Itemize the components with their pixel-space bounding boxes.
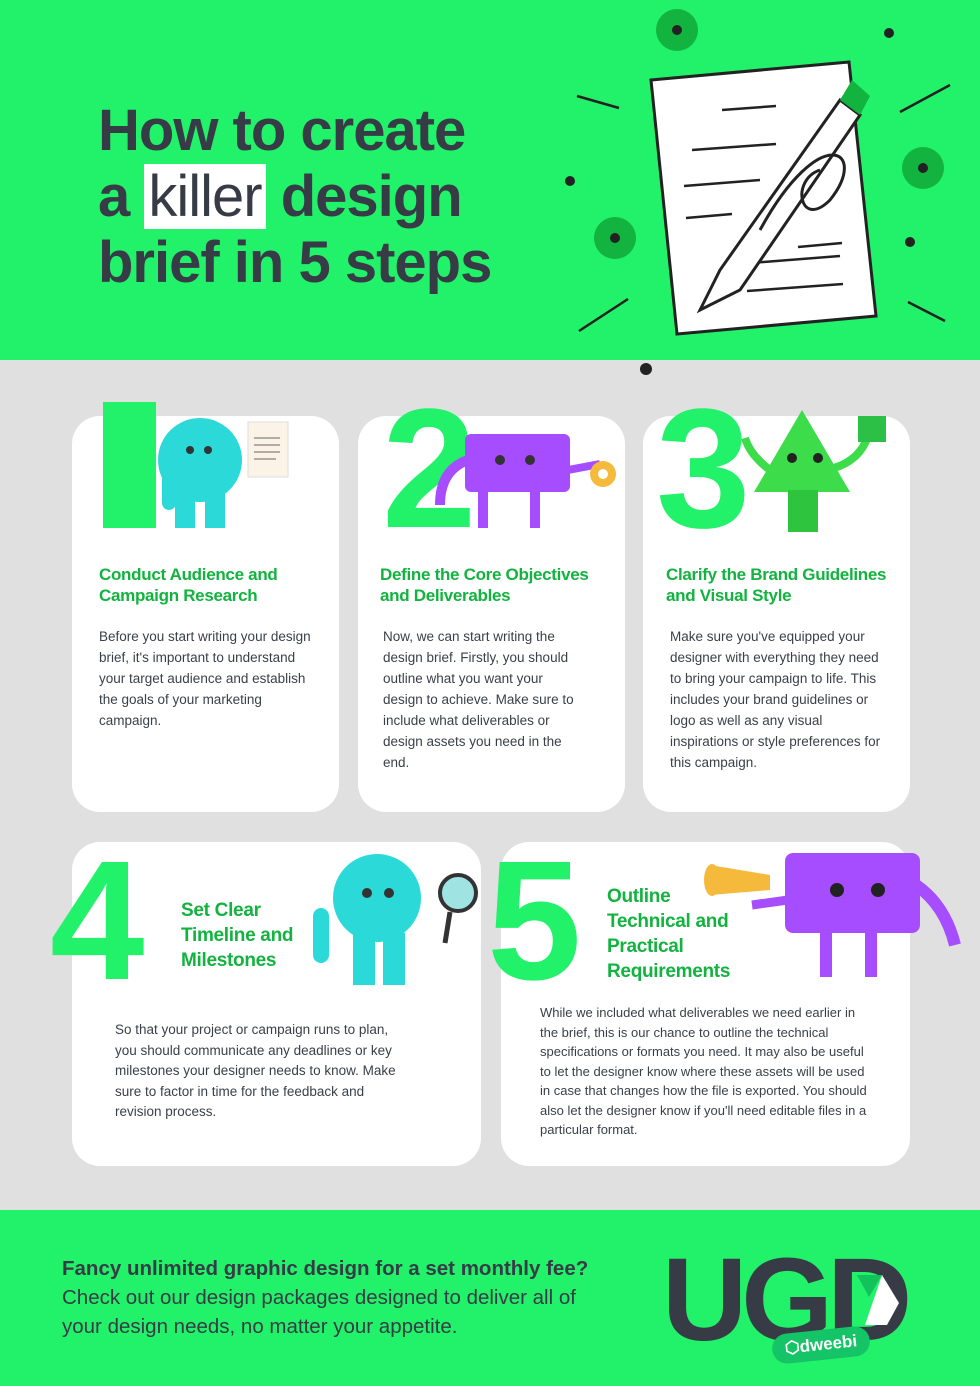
character 5 (704, 853, 961, 977)
heading 2: and Deliverables (380, 586, 510, 605)
text 1: Before you start writing your design brief, it's important to understand your target audience and establish the goals of your marketing campaign. (99, 629, 311, 728)
heading 4: Timeline and (181, 925, 293, 946)
footer band (0, 1210, 980, 1386)
footer text (62, 1257, 588, 1338)
card 5 (501, 842, 910, 1166)
dweebi badge (771, 1325, 871, 1365)
text 4: So that your project or campaign runs to plan, you should communicate any deadlines or key milestones your designer needs to know. Make sure to factor in time for the feedback and revision process. (115, 1022, 396, 1119)
dweebi badge: ⬡dweebi (784, 1331, 858, 1358)
card 3 (643, 416, 910, 812)
title (98, 98, 491, 295)
card 4 (72, 842, 481, 1166)
card 2 (358, 416, 625, 812)
footer text: Check out our design packages designed to deliver all of your design needs, no matter your appetite. (62, 1286, 576, 1338)
heading 4: Milestones (181, 950, 276, 971)
heading 3: Clarify the Brand Guidelines (666, 565, 886, 584)
text 2: Now, we can start writing the design brief. Firstly, you should outline what you want your design to achieve. Make sure to include what deliverables or design assets you need in the end. (383, 629, 574, 770)
heading 4: Set Clear (181, 900, 261, 921)
heading 5: Outline (607, 886, 670, 907)
heading 1 (99, 565, 278, 605)
heading 4 (181, 900, 293, 971)
card 1 (72, 416, 339, 812)
heading 1: Conduct Audience and (99, 565, 278, 584)
character 4 (313, 854, 478, 985)
heading 3: and Visual Style (666, 586, 791, 605)
heading 3 (666, 565, 886, 605)
number 5: 5 (487, 826, 582, 1016)
heading 1: Campaign Research (99, 586, 257, 605)
heading 2: Define the Core Objectives (380, 565, 589, 584)
title: a killer design (98, 164, 462, 229)
number 4: 4 (50, 826, 145, 1016)
character 2 (435, 434, 616, 528)
heading 5: Requirements (607, 961, 730, 982)
heading 2 (380, 565, 589, 605)
character 1 (158, 418, 288, 528)
heading 5 (607, 886, 730, 982)
character 3 (741, 410, 886, 532)
header band (0, 0, 980, 360)
text 3: Make sure you've equipped your designer with everything they need to bring your campaign to life. This includes your brand guidelines or logo as well as any visual inspirations or style preferences for this campaign. (670, 629, 880, 770)
title: brief in 5 steps (98, 230, 491, 295)
text 5: While we included what deliverables we need earlier in the brief, this is our chance to outline the technical specifications or formats you need. It may also be useful to let the designer know where these assets will be used in case that changes how the file is exported. You should also let the designer know if you'll need editable files in a particular format. (540, 1005, 867, 1137)
footer text: Fancy unlimited graphic design for a set monthly fee? (62, 1257, 588, 1280)
logo UGD: UGD (662, 1234, 906, 1366)
title: How to create (98, 98, 465, 163)
illustration: paper and pencil (565, 9, 951, 375)
heading 5: Practical (607, 936, 684, 957)
number 2: 2 (382, 374, 477, 564)
heading 5: Technical and (607, 911, 728, 932)
number 3: 3 (656, 374, 751, 564)
number 1 (103, 402, 156, 528)
